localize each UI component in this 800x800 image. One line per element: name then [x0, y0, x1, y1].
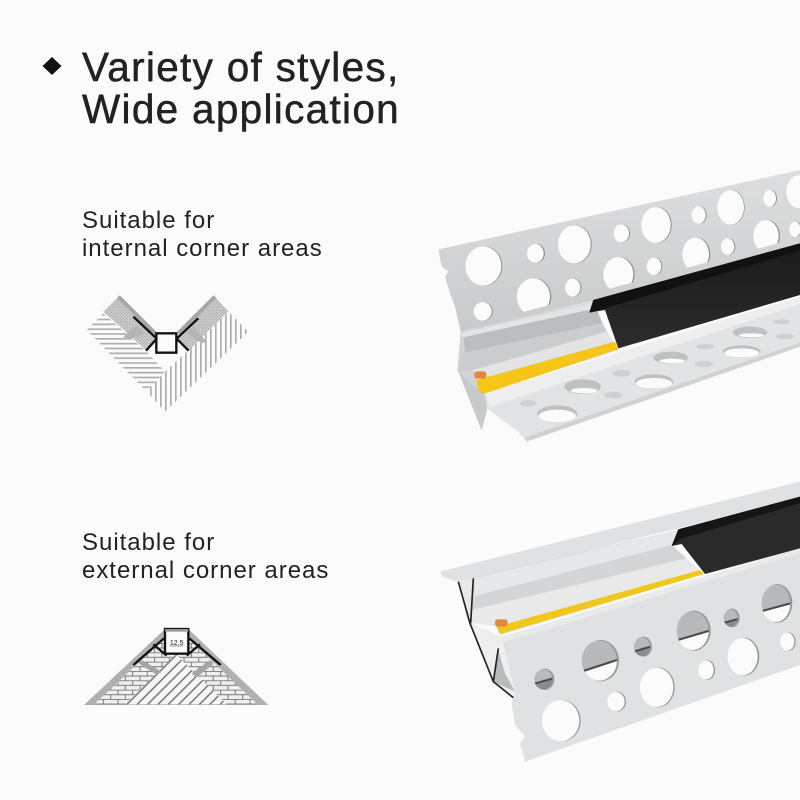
- black cover: [672, 497, 800, 574]
- black cover: [589, 243, 800, 348]
- lower flange: [485, 297, 800, 442]
- diagram: external corner cross-section: [84, 629, 268, 705]
- front flange: [502, 548, 800, 762]
- text: external corner caption: Suitable for: [82, 529, 215, 556]
- product: external corner profile: [440, 482, 800, 762]
- through holes: [534, 584, 792, 690]
- diagram: external corner cross-section: 12.5: [170, 640, 184, 647]
- LED chip: [474, 371, 486, 379]
- LED strip: [497, 570, 704, 634]
- LED chip: [495, 619, 508, 627]
- title: Variety of styles,: [82, 44, 400, 90]
- channel: [470, 530, 704, 635]
- bullet diamond: [42, 57, 62, 75]
- LED strip: [477, 342, 618, 394]
- product: internal corner profile: [438, 170, 800, 442]
- side wall below channel: [470, 623, 515, 697]
- text: internal corner caption: internal corner areas: [82, 235, 323, 262]
- side end: [458, 372, 487, 431]
- open holes: [542, 632, 796, 741]
- lower flange holes: [537, 327, 767, 423]
- lower flange edge shade: [525, 343, 800, 442]
- text: internal corner caption: Suitable for: [82, 207, 215, 234]
- rear thin flange: [440, 482, 800, 582]
- top flange holes: [465, 175, 800, 321]
- inner side wall: [458, 578, 473, 623]
- side edge lines: [458, 578, 513, 698]
- diagram: internal corner cross-section: [87, 297, 248, 412]
- title: Wide application: [82, 86, 400, 132]
- text: external corner caption: external corner areas: [82, 557, 329, 584]
- channel: [457, 302, 618, 393]
- top flange: [438, 170, 800, 332]
